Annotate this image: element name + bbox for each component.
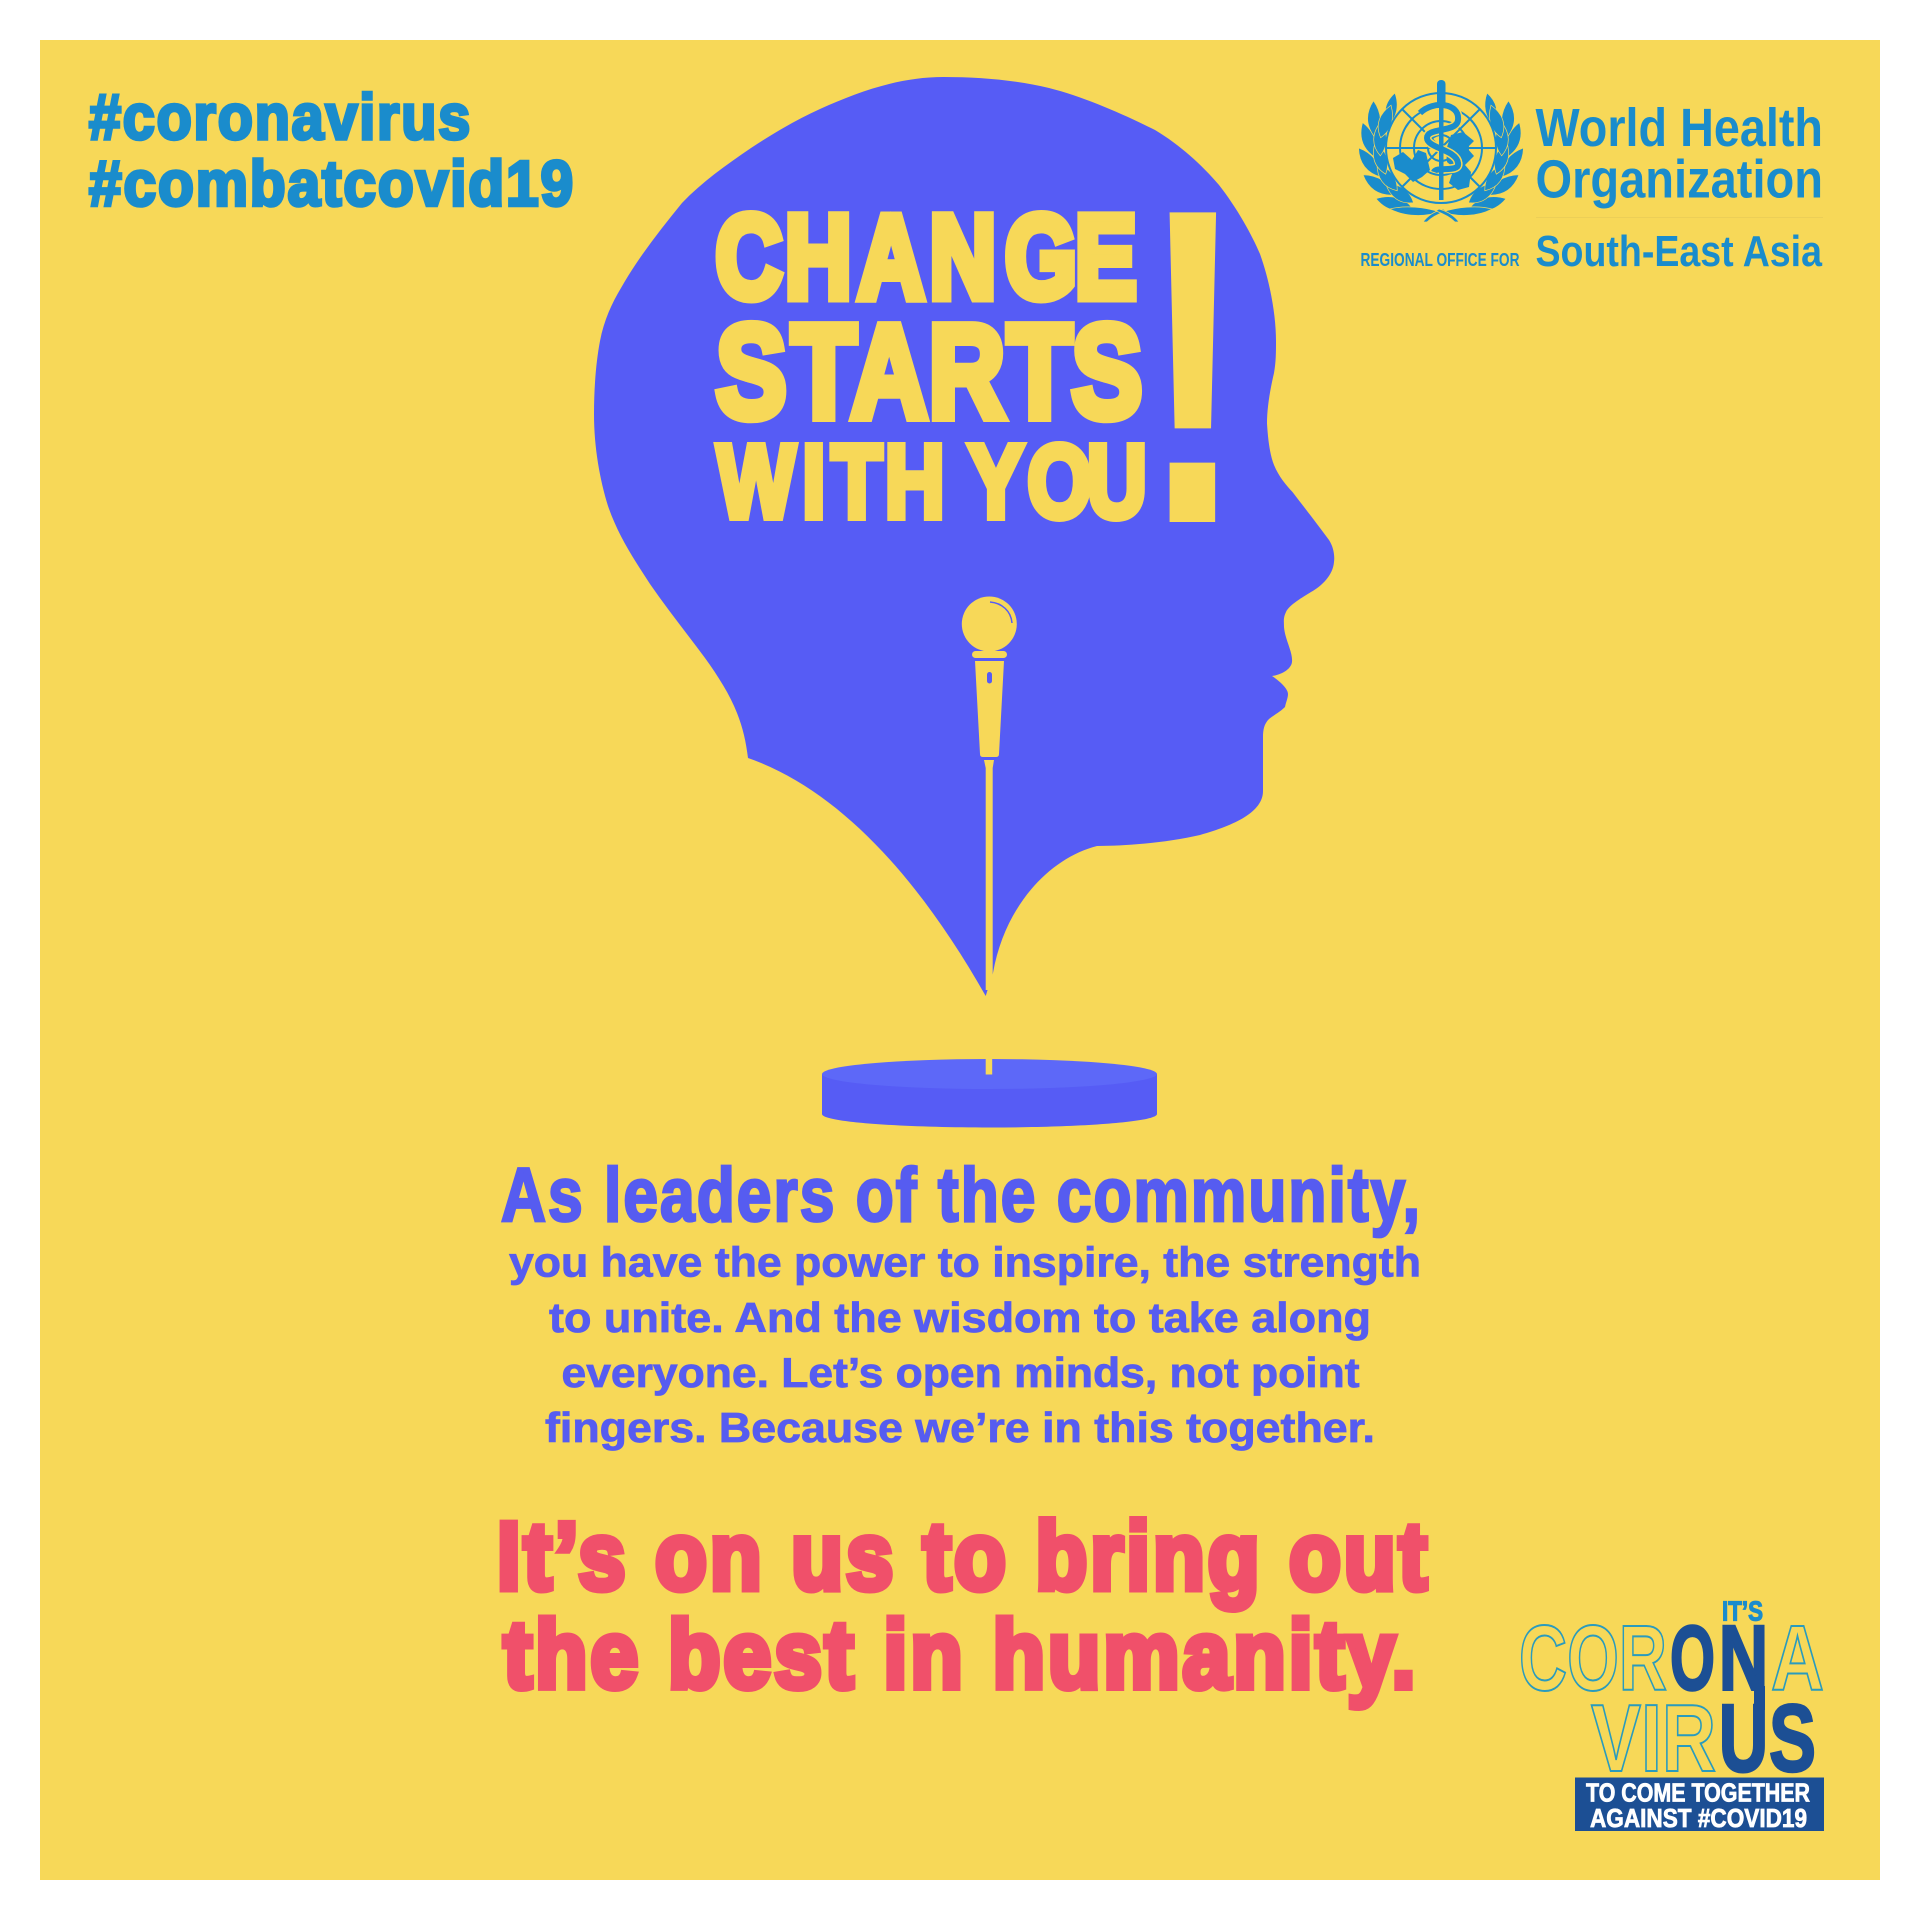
text block: leaders message: everyone. Let’s open minds, not point	[562, 1349, 1360, 1396]
hashtags: #combatcovid19	[89, 148, 575, 220]
hashtags: #coronavirus	[89, 81, 472, 153]
head silhouette	[594, 77, 1334, 996]
text block: leaders message	[501, 1153, 1422, 1451]
WHO logo	[1358, 80, 1823, 276]
campaign logo headline: O	[1670, 1608, 1715, 1710]
campaign logo: it's on us	[1519, 1596, 1824, 1833]
campaign logo headline: VIR	[1591, 1685, 1716, 1792]
icon: microphone	[962, 596, 1017, 990]
exclamation mark: !	[1139, 116, 1247, 618]
campaign logo headline: A	[1771, 1606, 1824, 1710]
campaign logo banner: AGAINST #COVID19	[1590, 1803, 1807, 1833]
title: change starts with you	[716, 191, 1147, 539]
campaign logo banner: TO COME TOGETHER	[1586, 1778, 1810, 1808]
text block: leaders message: you have the power to inspire, the strength	[509, 1238, 1421, 1286]
WHO wordmark: World Health	[1536, 98, 1823, 158]
WHO wordmark: REGIONAL OFFICE FOR	[1360, 249, 1520, 270]
campaign logo headline: U	[1719, 1685, 1768, 1792]
callout: bring out the best in humanity	[497, 1503, 1430, 1708]
campaign logo headline: N	[1719, 1608, 1768, 1710]
campaign logo headline: IT’S	[1722, 1596, 1763, 1626]
callout: bring out the best in humanity: It’s on us to bring out	[497, 1503, 1430, 1610]
text block: leaders message: As leaders of the community,	[501, 1153, 1422, 1238]
icon: WHO emblem	[1358, 80, 1524, 222]
WHO wordmark: South-East Asia	[1536, 227, 1822, 276]
hashtags	[89, 81, 575, 220]
callout: bring out the best in humanity: the best in humanity.	[504, 1602, 1418, 1708]
campaign logo headline: S	[1769, 1685, 1816, 1792]
title: change starts with you: WITH YOU	[717, 424, 1147, 539]
WHO wordmark	[1360, 98, 1823, 276]
microphone base	[822, 1059, 1157, 1128]
text block: leaders message: fingers. Because we’re in this together.	[545, 1404, 1375, 1451]
title: change starts with you: CHANGE	[716, 191, 1137, 323]
campaign logo headline: COR	[1519, 1606, 1667, 1710]
campaign logo headline	[1519, 1596, 1824, 1792]
WHO wordmark: Organization	[1536, 150, 1823, 210]
campaign logo banner	[1575, 1778, 1824, 1833]
text block: leaders message: to unite. And the wisdom to take along	[549, 1294, 1371, 1341]
title: change starts with you: STARTS	[716, 299, 1142, 446]
